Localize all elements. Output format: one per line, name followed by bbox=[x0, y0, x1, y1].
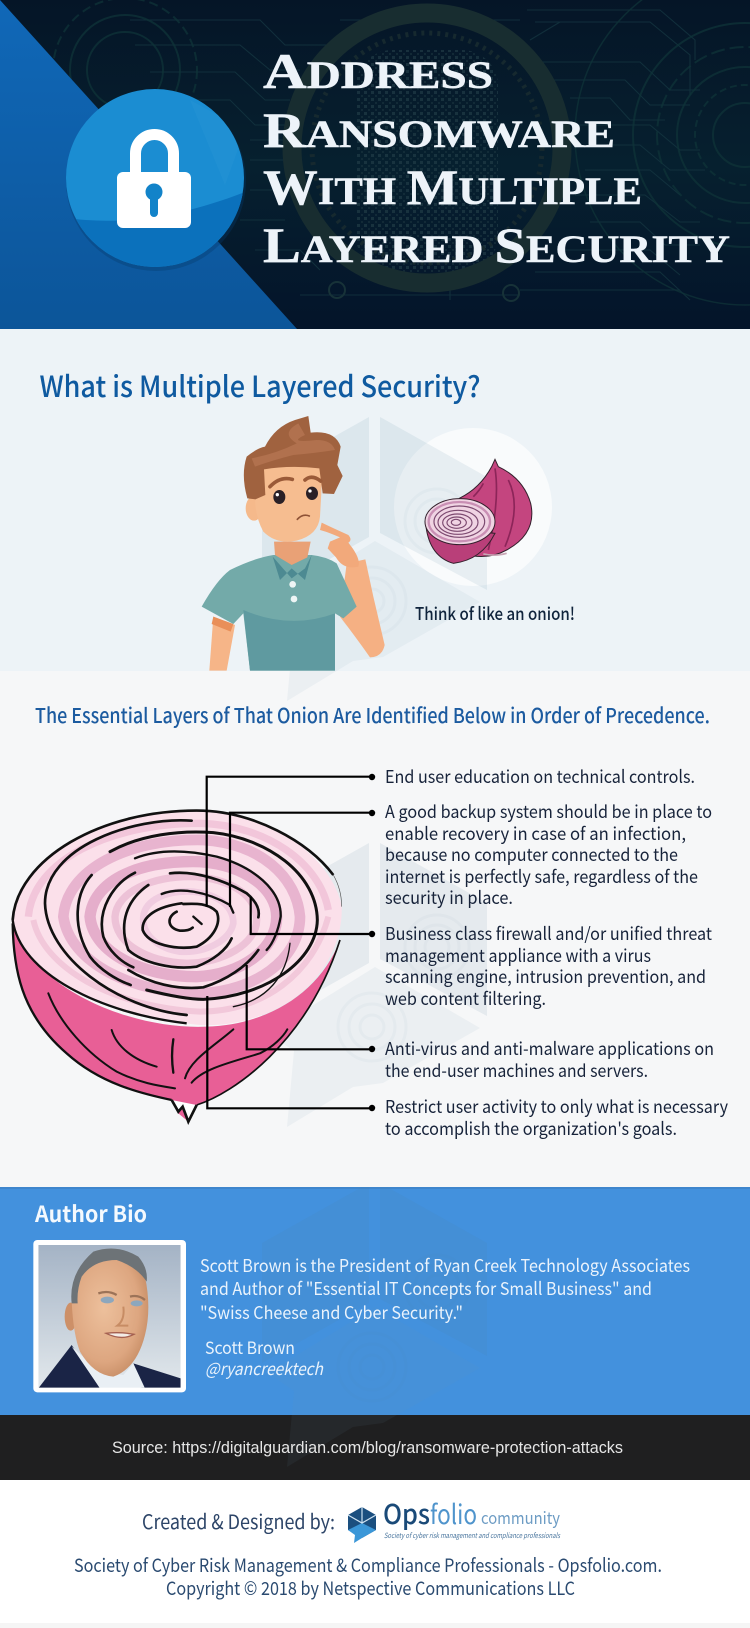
text block: layer two: security in place. bbox=[385, 885, 513, 910]
source line: Source: https://digitalguardian.com/blog/ransomware-protection-attacks bbox=[112, 1439, 623, 1457]
text block: layer three bbox=[385, 921, 712, 1011]
text block: layer two: because no computer connected to the bbox=[385, 842, 678, 867]
heading: author bio: Author Bio bbox=[34, 1197, 147, 1229]
caption: think of like an onion: Think of like an onion! bbox=[415, 601, 575, 626]
white blob behind small onion bbox=[394, 428, 552, 586]
text block: layer four bbox=[385, 1036, 714, 1083]
text block: author description: Scott Brown is the President of Ryan Creek Technology Associates bbox=[200, 1253, 690, 1278]
illustration: thinking man bbox=[202, 416, 385, 671]
author name and handle bbox=[205, 1334, 324, 1380]
footer: copyright: Copyright © 2018 by Netspective Communications LLC bbox=[166, 1575, 575, 1601]
logo: opsfolio community: folio bbox=[430, 1493, 477, 1532]
logo: opsfolio community: community bbox=[481, 1505, 560, 1529]
panel: hero bbox=[0, 0, 750, 329]
text block: layer three: Business class firewall and/or unified threat bbox=[385, 921, 712, 946]
text block: layer four: Anti-virus and anti-malware applications on bbox=[385, 1036, 714, 1061]
text block: layer two: internet is perfectly safe, regardless of the bbox=[385, 864, 698, 889]
watermark: section three bbox=[262, 843, 487, 1127]
title: LAYERED SECURITY bbox=[263, 217, 730, 273]
text block: layer four: the end-user machines and servers. bbox=[385, 1058, 648, 1083]
logo: opsfolio community: Ops bbox=[383, 1493, 430, 1532]
heading: what is multiple layered security: What is Multiple Layered Security? bbox=[40, 364, 480, 406]
icon: cube bbox=[348, 1507, 376, 1543]
section backgrounds bbox=[0, 329, 750, 1628]
decorative arcs bbox=[53, 0, 750, 305]
title: RANSOMWARE bbox=[263, 102, 615, 158]
icon: padlock badge bbox=[60, 89, 250, 280]
text block: author description: "Swiss Cheese and Cyber Security." bbox=[200, 1300, 463, 1325]
watermark: section two bbox=[262, 417, 487, 701]
text block: layer three: web content filtering. bbox=[385, 986, 546, 1011]
title: ADDRESS bbox=[263, 43, 493, 99]
credit: created and designed by: Created & Designed by: bbox=[142, 1506, 335, 1535]
text block: author description bbox=[200, 1253, 690, 1325]
logo: opsfolio community: Society of cyber risk management and compliance professionals bbox=[384, 1531, 561, 1541]
author name and handle: @ryancreektech bbox=[205, 1355, 324, 1380]
text block: layer one: End user education on technical controls. bbox=[385, 764, 695, 789]
text block: layer two: enable recovery in case of an infection, bbox=[385, 821, 686, 846]
title: WITH MULTIPLE bbox=[263, 159, 642, 215]
text block: layer two: A good backup system should be in place to bbox=[385, 799, 712, 824]
connector end dots bbox=[369, 774, 375, 1111]
title bbox=[263, 43, 730, 273]
connector lines bbox=[207, 777, 371, 1108]
blue triangle bbox=[0, 0, 297, 329]
text block: layer five bbox=[385, 1094, 728, 1141]
author photo bbox=[33, 1240, 186, 1392]
chip lock background bbox=[356, 50, 498, 272]
watermark: author band bbox=[287, 1254, 470, 1466]
circuit traces background bbox=[130, 10, 705, 300]
logo: opsfolio community bbox=[348, 1493, 561, 1543]
text block: layer five: Restrict user activity to only what is necessary bbox=[385, 1094, 728, 1119]
text block: layer three: management appliance with a virus bbox=[385, 943, 651, 968]
illustration: large onion cross-section bbox=[13, 811, 342, 1122]
text block: author description: and Author of "Essential IT Concepts for Small Business" and bbox=[200, 1276, 652, 1301]
footer: society line: Society of Cyber Risk Management & Compliance Professionals - Opsfolio.com. bbox=[74, 1552, 662, 1578]
author name and handle: Scott Brown bbox=[205, 1334, 295, 1359]
icon: small red onion bbox=[425, 459, 532, 563]
text block: layer three: scanning engine, intrusion prevention, and bbox=[385, 964, 706, 989]
text block: layer five: to accomplish the organization's goals. bbox=[385, 1116, 677, 1141]
text block: layer two bbox=[385, 799, 712, 910]
